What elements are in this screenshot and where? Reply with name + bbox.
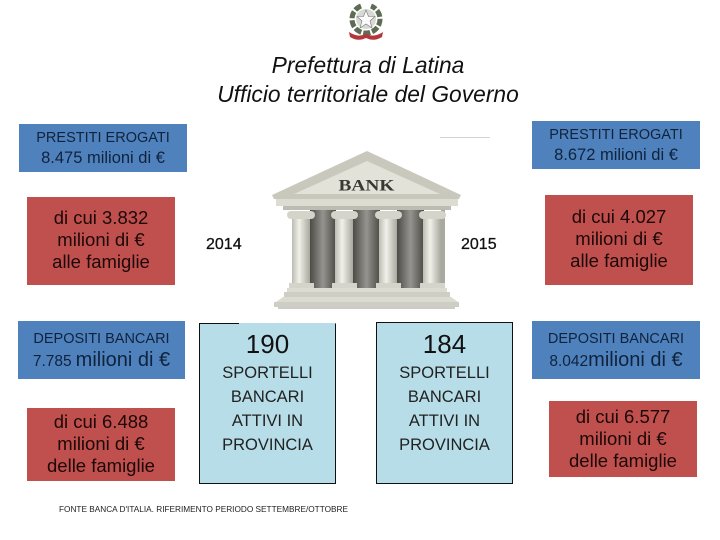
panel: prestiti 2015: 8.672 milioni di €: [554, 146, 678, 164]
label: year 2015: 2015: [461, 236, 497, 253]
panel: depositi 2015: DEPOSITI BANCARI: [548, 331, 684, 347]
panel: famiglie 2014: milioni di €: [57, 229, 145, 250]
panel: famiglie depositi 2014: di cui 6.488: [54, 411, 148, 432]
title: Ufficio territoriale del Governo: [217, 81, 519, 107]
panel: prestiti 2015: PRESTITI EROGATI: [549, 127, 683, 143]
panel: sportelli 2014: BANCARI: [231, 388, 304, 406]
panel: depositi 2014: [18, 321, 185, 379]
panel: prestiti 2015: [532, 121, 700, 169]
panel: depositi 2014: 7.785 milioni di €: [33, 349, 170, 371]
panel: sportelli 2015: 184: [423, 329, 466, 359]
panel: famiglie depositi 2015: delle famiglie: [569, 450, 677, 471]
panel: sportelli 2014: [199, 323, 336, 484]
icon: bank building: [272, 137, 490, 309]
source note: FONTE BANCA D'ITALIA. RIFERIMENTO PERIODO SETTEMBRE/OTTOBRE: [59, 505, 348, 514]
panel: depositi 2015: 8.042milioni di €: [549, 349, 683, 371]
panel: famiglie depositi 2015: milioni di €: [579, 428, 667, 449]
panel: sportelli 2015: SPORTELLI: [399, 364, 490, 382]
panel: famiglie 2014: [27, 197, 175, 285]
panel: depositi 2014: DEPOSITI BANCARI: [33, 331, 170, 347]
panel: depositi 2015: [532, 321, 700, 379]
panel: prestiti 2014: [19, 124, 187, 172]
panel: sportelli 2015: BANCARI: [408, 388, 481, 406]
panel: famiglie depositi 2014: milioni di €: [57, 433, 145, 454]
panel: famiglie 2015: alle famiglie: [570, 250, 668, 271]
panel: prestiti 2014: 8.475 milioni di €: [41, 149, 165, 167]
panel: famiglie 2015: di cui 4.027: [572, 206, 666, 227]
panel: sportelli 2014: ATTIVI IN: [232, 412, 303, 430]
panel: sportelli 2014: SPORTELLI: [222, 364, 313, 382]
panel: famiglie depositi 2014: [27, 408, 175, 481]
panel: famiglie depositi 2015: [549, 401, 697, 477]
panel: sportelli 2015: ATTIVI IN: [409, 412, 480, 430]
panel: famiglie 2015: milioni di €: [575, 228, 663, 249]
panel: famiglie 2014: alle famiglie: [52, 251, 150, 272]
icon: Italian Republic emblem: [349, 4, 383, 40]
panel: famiglie depositi 2014: delle famiglie: [47, 455, 155, 476]
panel: famiglie depositi 2015: di cui 6.577: [576, 406, 670, 427]
panel: sportelli 2015: [376, 322, 513, 484]
label: year 2014: 2014: [206, 236, 242, 253]
panel: sportelli 2014: 190: [246, 329, 289, 359]
panel: sportelli 2014: PROVINCIA: [222, 436, 313, 454]
panel: famiglie 2014: di cui 3.832: [54, 207, 148, 228]
title: [217, 52, 519, 107]
panel: sportelli 2015: PROVINCIA: [399, 436, 490, 454]
panel: prestiti 2014: PRESTITI EROGATI: [36, 130, 170, 146]
panel: famiglie 2015: [545, 195, 693, 285]
title: Prefettura di Latina: [272, 52, 464, 78]
label: BANK: BANK: [338, 178, 394, 194]
